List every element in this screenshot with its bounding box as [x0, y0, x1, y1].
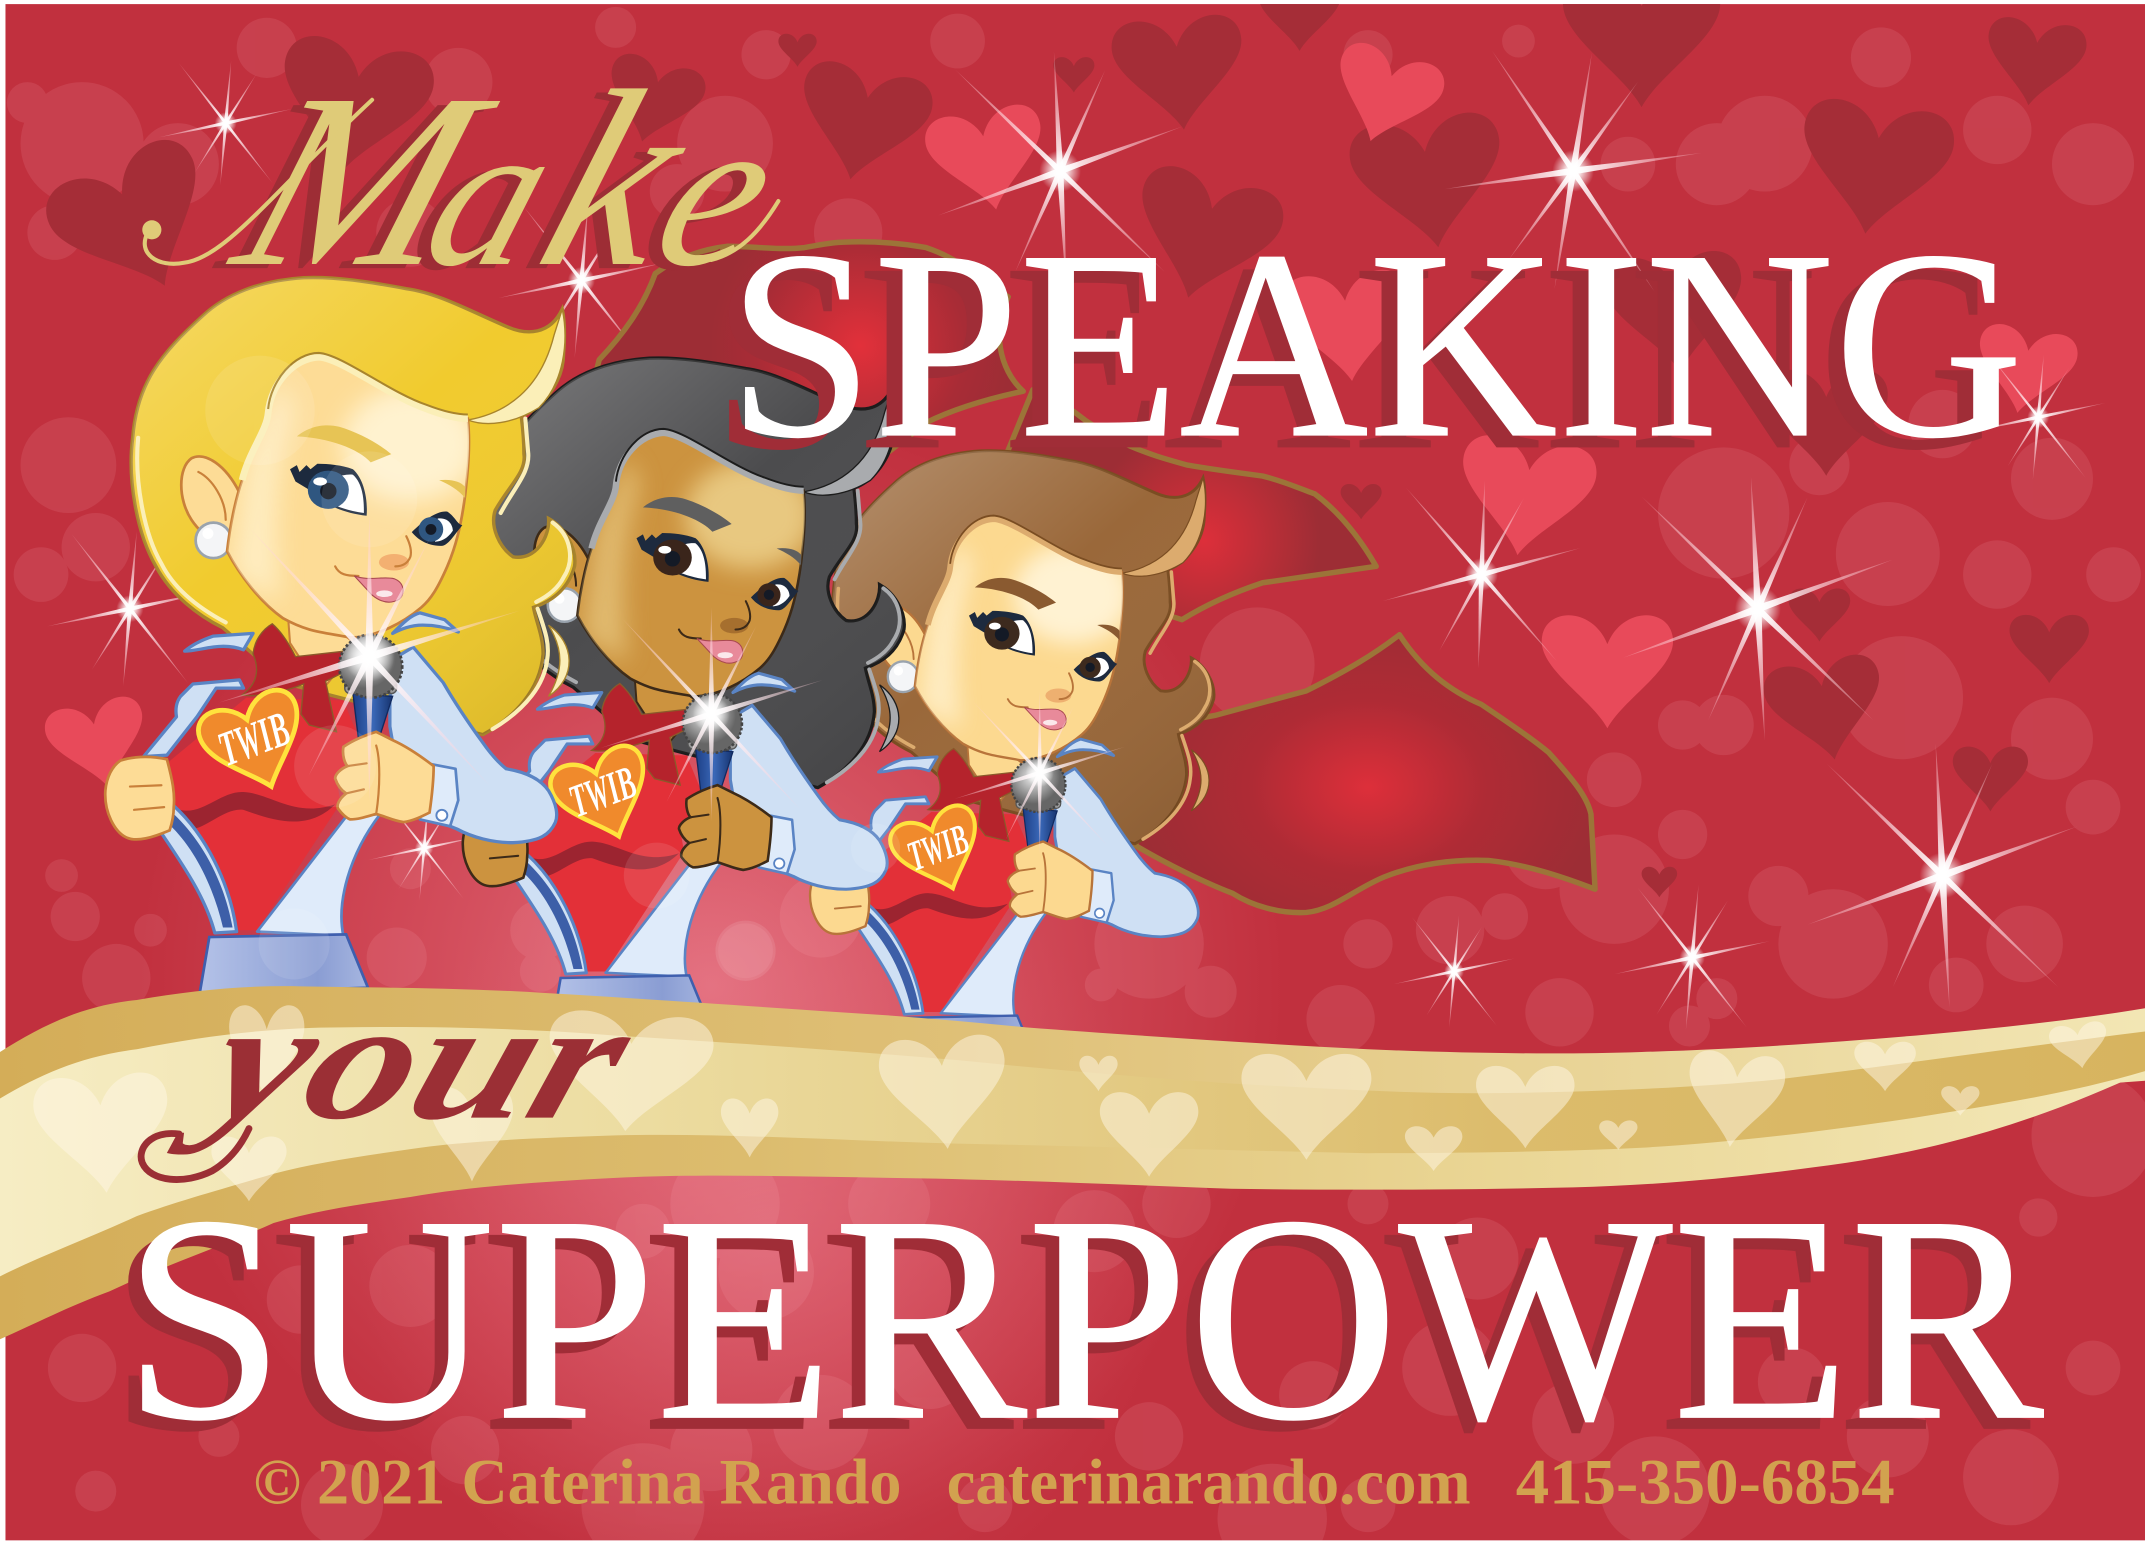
light background hearts [41, 37, 2081, 796]
microphone sparkles [203, 499, 1134, 862]
footer copyright and contact line: 415-350-6854 [1516, 1446, 1895, 1517]
background sparkle stars [47, 35, 2106, 1030]
title word: SPEAKING: SPEAKING [711, 208, 2007, 506]
character: blonde superhero speaker [105, 277, 575, 993]
footer copyright and contact line [253, 1446, 1895, 1517]
dark background hearts [36, 0, 2089, 897]
translucent ribbon hearts [32, 1005, 2111, 1201]
gold ribbon banner [0, 986, 2145, 1339]
title word: SUPERPOWER: SUPERPOWER [123, 1155, 2045, 1481]
title word: SUPERPOWER: SUPERPOWER [109, 1166, 2032, 1492]
title word: SPEAKING: SPEAKING [728, 196, 2023, 494]
character: brunette superhero speaker [810, 451, 1214, 1066]
title word: your: your [166, 965, 655, 1155]
title word: Make: Make [207, 40, 816, 320]
title word: Make: Make [194, 44, 802, 324]
red cape with gold outline [588, 242, 1595, 913]
character: dark-haired superhero speaker [463, 358, 904, 1031]
bokeh circles overlaying the characters [205, 356, 900, 981]
footer copyright and contact line: © 2021 Caterina Rando [253, 1446, 902, 1517]
footer copyright and contact line: caterinarando.com [947, 1446, 1471, 1517]
